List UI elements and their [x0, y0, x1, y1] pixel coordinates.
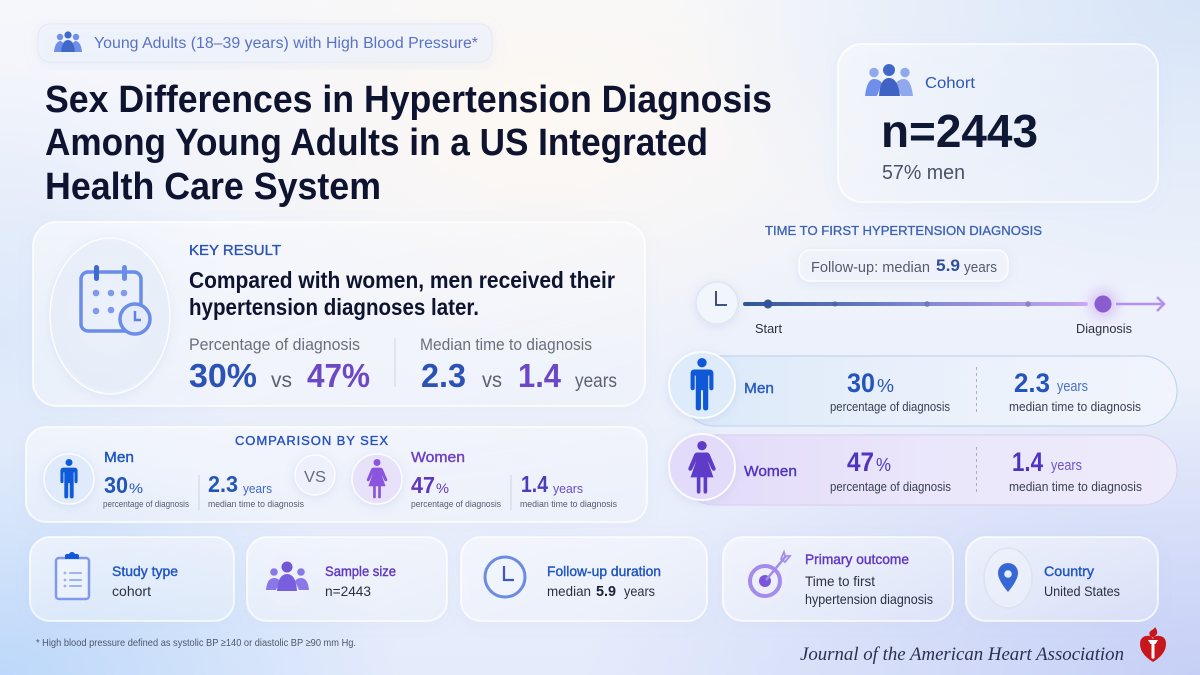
icon: man: [44, 454, 94, 504]
cohort share of men: 57% men: [882, 162, 965, 184]
study type text: [112, 563, 178, 599]
card: follow-up duration: [461, 537, 707, 621]
follow-up text: [547, 563, 661, 600]
icon: calendar with clock: [50, 238, 170, 394]
vs badge: [295, 455, 335, 495]
country text: United States: [1044, 583, 1120, 599]
men percentage: 30: [847, 368, 875, 398]
icon: cohort people: [865, 64, 913, 96]
percentage of diagnosis stat: 47%: [307, 357, 370, 394]
timeline heading: TIME TO FIRST HYPERTENSION DIAGNOSIS: [765, 223, 1042, 238]
panel: women row: [669, 434, 1177, 505]
men stats: %: [129, 480, 143, 496]
men label: Men: [744, 380, 774, 397]
median time stat: 2.3: [421, 357, 466, 394]
vs badge: VS: [304, 469, 326, 486]
men stats: [103, 449, 304, 510]
men median time: median time to diagnosis: [1009, 400, 1141, 414]
primary outcome text: hypertension diagnosis: [805, 591, 933, 607]
median time stat: vs: [482, 369, 502, 392]
women percentage: %: [876, 455, 891, 475]
men median time: 2.3: [1014, 368, 1050, 398]
country text: Country: [1044, 563, 1094, 579]
women median time: median time to diagnosis: [1009, 480, 1142, 494]
arrow: [1116, 297, 1164, 311]
title: [45, 79, 772, 208]
men stats: Men: [104, 449, 134, 466]
icon: clipboard: [56, 552, 89, 599]
icon: man: [669, 352, 735, 418]
key result label: KEY RESULT: [189, 242, 281, 259]
icon: people group: [54, 31, 82, 52]
start label: Start: [755, 322, 783, 336]
card: primary outcome: [723, 537, 953, 621]
women median time: 1.4: [1012, 447, 1043, 477]
journal name: Journal of the American Heart Association: [800, 644, 1124, 665]
follow-up pill: Follow-up: median: [811, 259, 930, 276]
icon: sample people: [265, 554, 309, 606]
icon: heart and torch logo: [1140, 627, 1166, 662]
percentage of diagnosis stat: [189, 335, 370, 394]
icon: woman: [669, 434, 735, 500]
panel: comparison by sex: [26, 427, 647, 522]
panel: men row: [669, 352, 1177, 426]
follow-up text: Follow-up duration: [547, 563, 661, 579]
women stats: Women: [411, 449, 465, 466]
women stats: [411, 449, 617, 510]
women stats: years: [553, 481, 583, 496]
men median time: [1009, 368, 1141, 414]
card: study type: [30, 537, 234, 621]
follow-up pill: [799, 250, 1008, 281]
men median time: years: [1057, 379, 1088, 395]
primary outcome text: Primary outcome: [805, 551, 909, 567]
diagnosis marker: [1094, 296, 1112, 312]
percentage of diagnosis stat: 30%: [189, 357, 257, 394]
sample size text: Sample size: [325, 563, 396, 579]
study type text: cohort: [112, 583, 151, 599]
men stats: 2.3: [208, 471, 238, 497]
sample size text: n=2443: [325, 583, 371, 599]
pill text: Young Adults (18–39 years) with High Blood Pressure*: [94, 35, 478, 52]
follow-up text: 5.9: [596, 584, 616, 600]
women percentage: [830, 447, 951, 494]
women stats: %: [436, 480, 449, 496]
study type text: Study type: [112, 563, 178, 579]
icon: location pin: [984, 548, 1032, 608]
card: sample size: [247, 537, 447, 621]
title: Sex Differences in Hypertension Diagnosis: [45, 79, 772, 121]
men percentage: percentage of diagnosis: [830, 400, 950, 414]
comparison heading: COMPARISON BY SEX: [235, 433, 388, 448]
panel: key result: [33, 222, 645, 406]
primary outcome text: [805, 551, 933, 607]
cohort label: Cohort: [925, 75, 976, 92]
panel: cohort: [838, 44, 1158, 202]
men stats: percentage of diagnosis: [103, 499, 189, 510]
men stats: median time to diagnosis: [208, 499, 304, 510]
icon: timeline clock: [696, 282, 738, 324]
key result statement: hypertension diagnoses later.: [189, 294, 479, 320]
country text: [1044, 563, 1120, 599]
follow-up pill: years: [964, 259, 997, 276]
women median time: [1009, 447, 1142, 494]
men percentage: [830, 368, 950, 414]
men percentage: %: [877, 376, 894, 396]
percentage of diagnosis stat: Percentage of diagnosis: [189, 335, 360, 354]
median time stat: [420, 335, 617, 394]
sample size text: [325, 563, 396, 599]
key result statement: [189, 267, 615, 320]
footnote: * High blood pressure defined as systolic BP ≥140 or diastolic BP ≥90 mm Hg.: [36, 637, 356, 649]
title: Health Care System: [45, 166, 381, 208]
men stats: years: [243, 481, 272, 496]
icon: clock: [485, 557, 525, 597]
diagnosis label: Diagnosis: [1076, 322, 1132, 336]
women percentage: percentage of diagnosis: [830, 480, 951, 494]
icon: target: [743, 552, 790, 602]
women percentage: 47: [847, 447, 874, 477]
women label: Women: [744, 463, 797, 480]
audience pill: [38, 24, 492, 62]
median time stat: 1.4: [518, 357, 562, 394]
women stats: 1.4: [521, 471, 548, 497]
card: country: [966, 537, 1158, 621]
key result statement: Compared with women, men received their: [189, 267, 615, 293]
cohort value: n=2443: [881, 105, 1038, 157]
women median time: years: [1051, 458, 1082, 474]
primary outcome text: Time to first: [805, 573, 875, 589]
follow-up text: years: [624, 583, 655, 599]
median time stat: years: [575, 371, 617, 392]
median time stat: Median time to diagnosis: [420, 335, 592, 354]
follow-up text: median: [547, 583, 591, 599]
icon: woman: [352, 454, 402, 504]
title: Among Young Adults in a US Integrated: [45, 122, 708, 164]
timeline: [696, 282, 1164, 336]
women stats: 47: [411, 472, 435, 498]
men stats: 30: [104, 472, 128, 498]
follow-up pill: 5.9: [936, 256, 960, 275]
percentage of diagnosis stat: vs: [271, 369, 292, 392]
women stats: median time to diagnosis: [520, 499, 617, 510]
women stats: percentage of diagnosis: [411, 499, 501, 510]
